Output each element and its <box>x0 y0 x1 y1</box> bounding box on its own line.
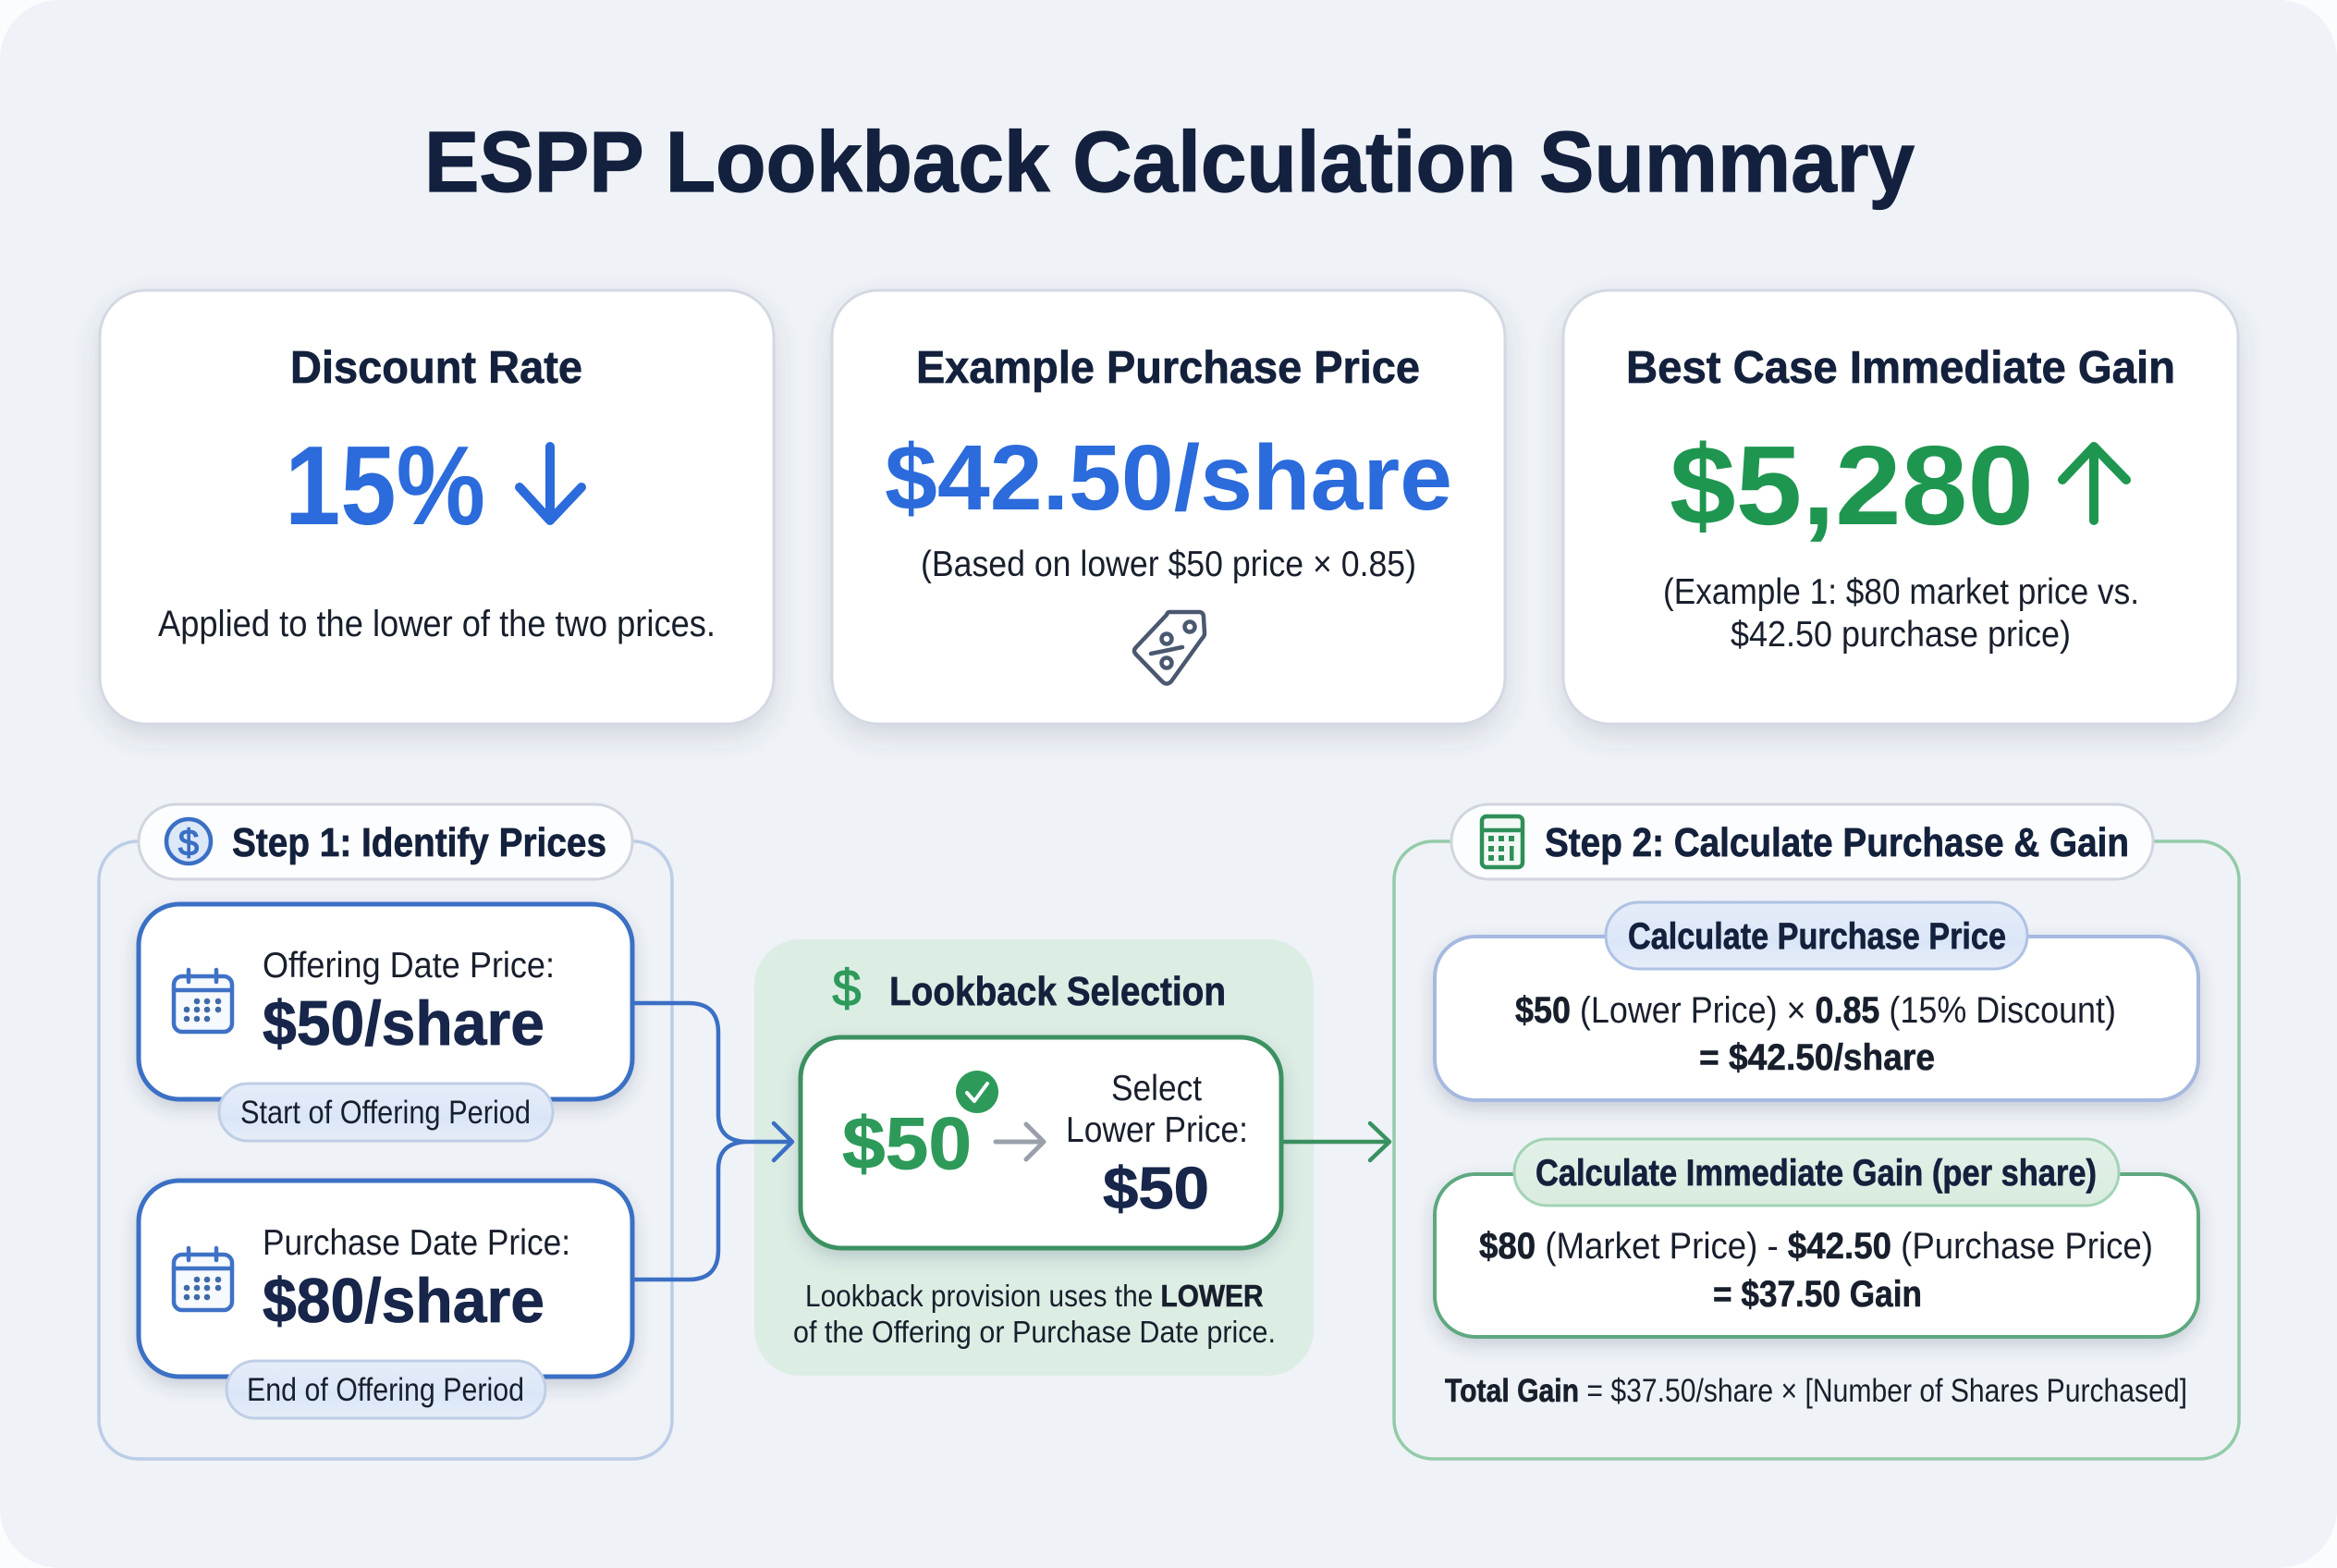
end of offering period pill <box>226 1361 545 1418</box>
total gain formula: Total Gain = $37.50/share × [Number of Shares Purchased] <box>1445 1373 2187 1409</box>
select lower price label: Select <box>1111 1069 1202 1109</box>
icon: dollar circle: $ <box>178 823 199 864</box>
lookback provision note <box>793 1279 1276 1349</box>
calculate immediate gain pill: Calculate Immediate Gain (per share) <box>1536 1153 2097 1194</box>
step 2 heading text: Step 2: Calculate Purchase & Gain <box>1545 820 2129 865</box>
icon: dollar circle <box>166 819 211 864</box>
heading: discount rate: Discount Rate <box>290 343 582 393</box>
offering date label: Offering Date Price: <box>263 946 555 986</box>
icon: price tag <box>1134 612 1205 684</box>
icon: check badge <box>956 1071 998 1113</box>
panel: discount rate card <box>100 290 774 724</box>
panel: step 1 identify prices <box>99 804 672 1459</box>
immediate gain formula: = $37.50 Gain <box>1713 1274 1922 1315</box>
description: Applied to the lower of the two prices. <box>158 604 716 644</box>
step 1 heading pill <box>139 804 632 879</box>
start of offering period pill <box>219 1084 553 1141</box>
arrow: lookback selection to step 2 <box>1282 1123 1389 1160</box>
panel: step 2 calculate purchase and gain <box>1394 804 2239 1459</box>
value: navy $50: $50 <box>1103 1155 1209 1221</box>
calculate immediate gain box <box>1435 1139 2198 1337</box>
icon: down arrow <box>520 447 581 521</box>
offering date price box <box>139 904 632 1141</box>
title: ESPP Lookback Calculation Summary <box>424 114 1915 210</box>
example note: $42.50 purchase price) <box>1731 615 2071 655</box>
select lower price label: Lower Price: <box>1066 1110 1248 1150</box>
purchase price formula: = $42.50/share <box>1699 1037 1935 1078</box>
panel: best case immediate gain card <box>1563 290 2238 724</box>
example note: (Example 1: $80 market price vs. <box>1663 572 2139 612</box>
heading: example purchase price: Example Purchase Price <box>916 343 1420 393</box>
value: green $50: $50 <box>842 1102 972 1184</box>
icon: calendar <box>174 970 232 1032</box>
icon: calendar <box>174 1248 232 1310</box>
offering date value: $50/share <box>263 988 544 1059</box>
immediate gain formula <box>1479 1226 2153 1315</box>
panel: lookback selection <box>754 939 1389 1376</box>
immediate gain formula: $80 (Market Price) - $42.50 (Purchase Price) <box>1479 1226 2153 1267</box>
purchase date price box <box>139 1181 632 1418</box>
connector: offering and purchase prices to lookback selection <box>633 1003 792 1280</box>
heading: best case immediate gain: Best Case Immediate Gain <box>1626 343 2175 393</box>
step 1 heading text: Step 1: Identify Prices <box>232 820 606 865</box>
icon: up arrow <box>2062 447 2126 521</box>
arrow: grey <box>996 1124 1044 1159</box>
end of offering period pill: End of Offering Period <box>247 1372 524 1408</box>
select lower price label <box>1066 1069 1248 1150</box>
lookback provision note: Lookback provision uses the LOWER <box>805 1279 1264 1313</box>
panel: example purchase price card <box>832 290 1505 724</box>
start of offering period pill: Start of Offering Period <box>240 1095 531 1131</box>
purchase date label: Purchase Date Price: <box>263 1223 570 1263</box>
purchase date value: $80/share <box>263 1266 544 1336</box>
icon: dollar sign: $ <box>832 959 862 1017</box>
value: $42.50/share: $42.50/share <box>885 426 1452 530</box>
selection box <box>801 1037 1281 1248</box>
purchase price formula: $50 (Lower Price) × 0.85 (15% Discount) <box>1515 990 2116 1031</box>
calculate purchase price pill: Calculate Purchase Price <box>1628 916 2006 957</box>
calculate purchase price box <box>1435 902 2198 1100</box>
example note <box>1663 572 2139 655</box>
formula note: (Based on lower $50 price × 0.85) <box>921 545 1416 584</box>
lookback provision note: of the Offering or Purchase Date price. <box>793 1315 1276 1349</box>
purchase price formula <box>1515 990 2116 1078</box>
calculate immediate gain pill <box>1514 1139 2119 1206</box>
step 2 heading pill <box>1451 804 2153 879</box>
icon: calculator <box>1482 816 1523 867</box>
value: 15%: 15% <box>285 423 485 548</box>
value: $5,280: $5,280 <box>1670 423 2034 548</box>
calculate purchase price pill <box>1606 902 2027 969</box>
lookback selection heading: Lookback Selection <box>889 969 1226 1014</box>
